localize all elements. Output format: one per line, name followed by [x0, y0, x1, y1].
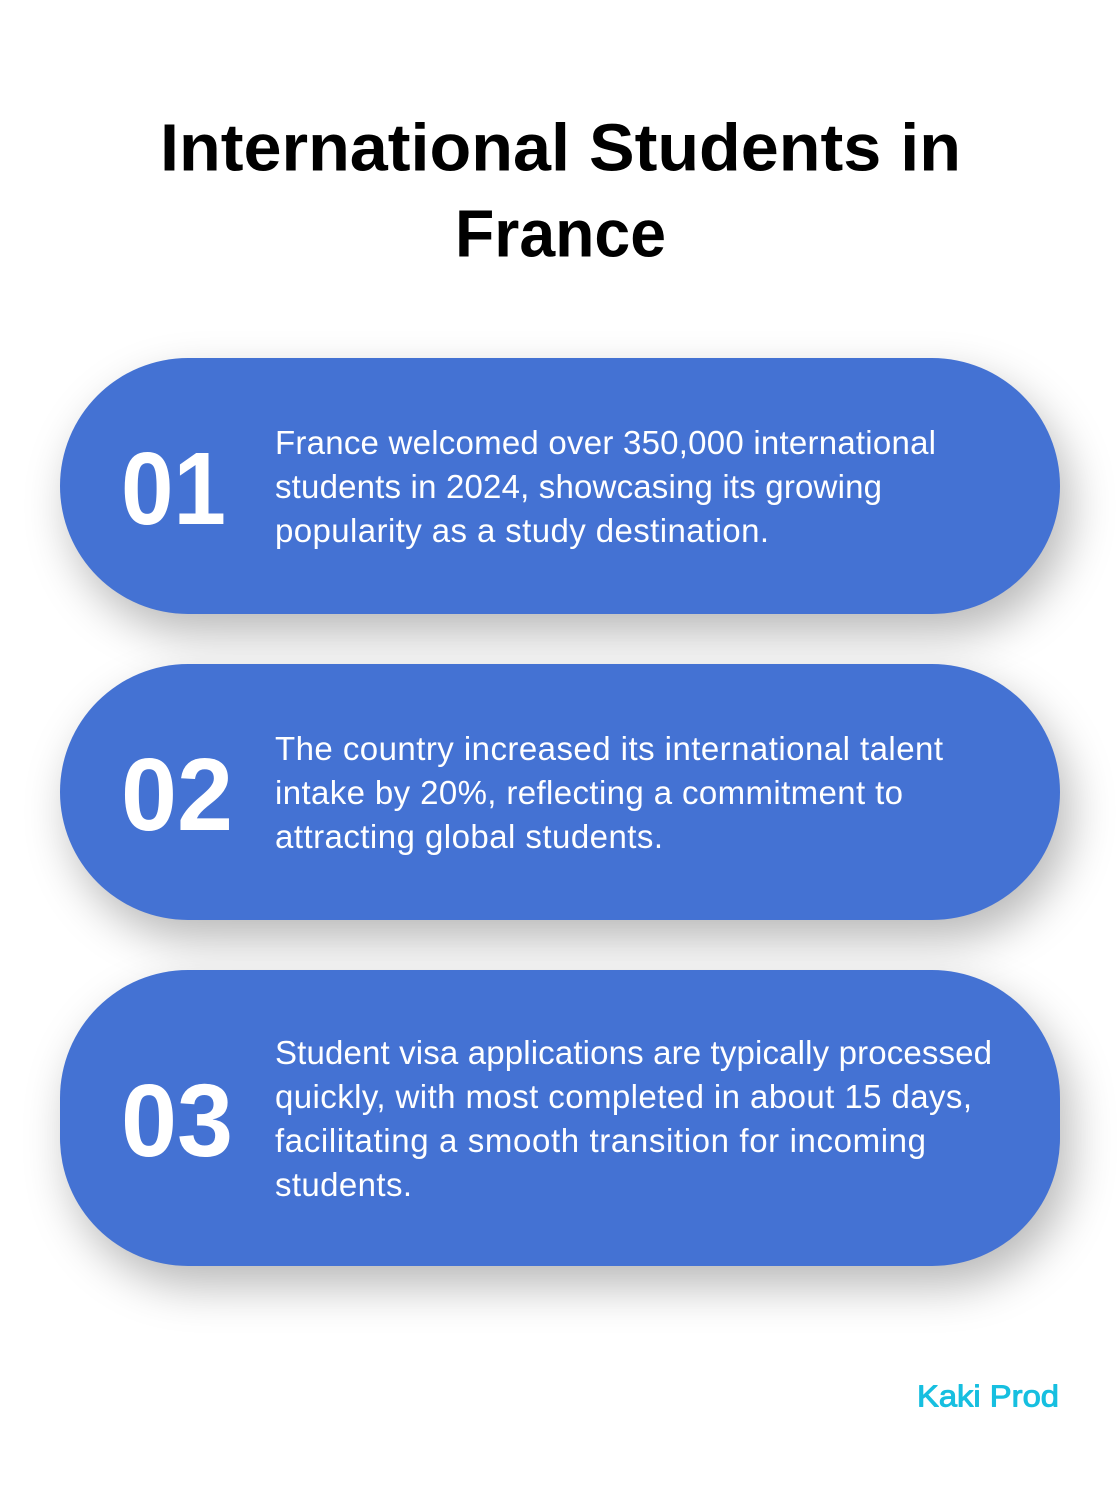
- text block: card 02: [275, 730, 943, 855]
- title: [160, 110, 961, 272]
- panel: card 01: [60, 358, 1060, 614]
- text block: card 02: intake by 20%, reflecting a commitment to: [275, 774, 903, 811]
- number 01: 01: [121, 431, 226, 546]
- text block: card 01: popularity as a study destination.: [275, 512, 769, 549]
- number 02: 02: [121, 737, 233, 852]
- panel: card 02: [60, 664, 1060, 920]
- logo: Kaki Prod: Kaki Prod: [917, 1378, 1059, 1414]
- text block: card 03: students.: [275, 1166, 412, 1203]
- text block: card 01: France welcomed over 350,000 international: [275, 424, 936, 461]
- text block: card 02: attracting global students.: [275, 818, 663, 855]
- text block: card 03: [275, 1034, 992, 1203]
- text block: card 01: students in 2024, showcasing its growing: [275, 468, 882, 505]
- title: France: [455, 196, 666, 272]
- text block: card 03: facilitating a smooth transition for incoming: [275, 1122, 926, 1159]
- text block: card 03: Student visa applications are typically processed: [275, 1034, 992, 1071]
- panel: card 03: [60, 970, 1060, 1266]
- text block: card 03: quickly, with most completed in about 15 days,: [275, 1078, 972, 1115]
- title: International Students in: [160, 110, 961, 186]
- text block: card 02: The country increased its international talent: [275, 730, 943, 767]
- number 03: 03: [121, 1063, 233, 1178]
- text block: card 01: [275, 424, 936, 549]
